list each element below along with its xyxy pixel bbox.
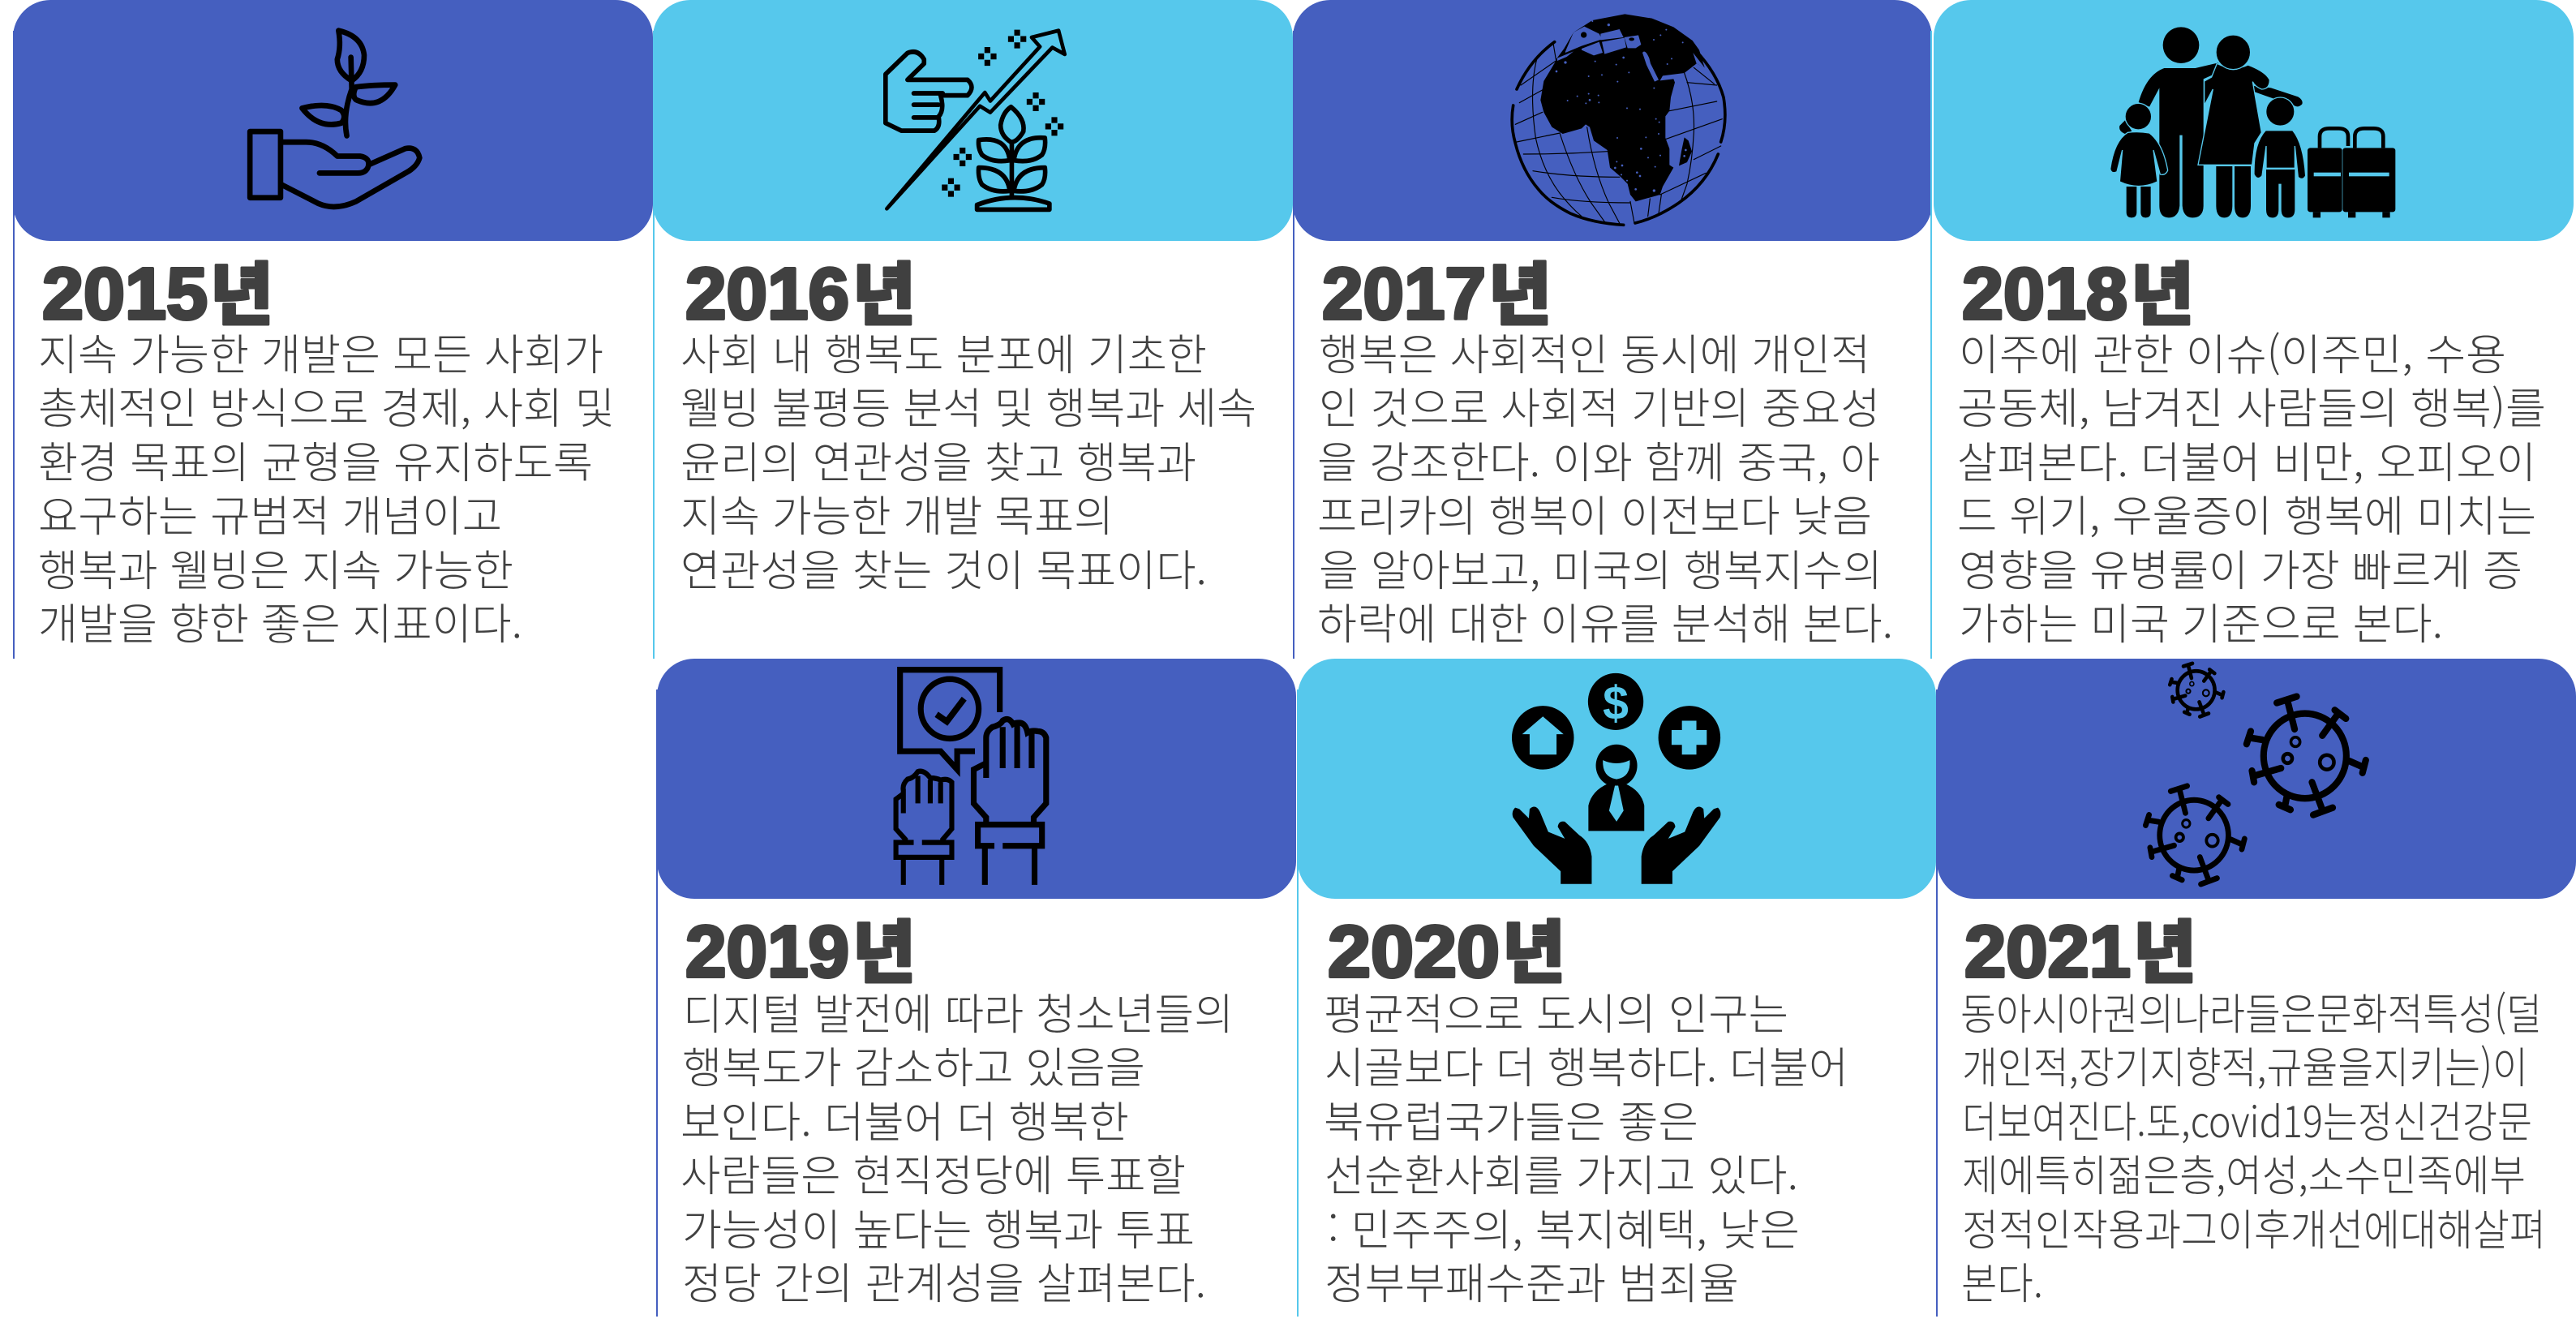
year title: 2018: 년 (2131, 257, 2194, 333)
body text: 2018 (1957, 321, 2546, 652)
body text: 2021: 본다. (1961, 1250, 2043, 1312)
body text: 2019: 사람들은 현직정당에 투표할 (680, 1142, 1186, 1204)
panel: 2016 (653, 0, 1293, 659)
body text: 2020: 정부부패수준과 범죄율 (1324, 1250, 1739, 1312)
body text: 2020 (1324, 981, 1848, 1312)
body text: 2015 (38, 321, 615, 652)
year title: 2017: 년 (1488, 257, 1552, 333)
year title: 2015: 년 (210, 257, 273, 333)
body text: 2017: 을 강조한다. 이와 함께 중국, 아 (1317, 429, 1880, 491)
body text: 2018: 드 위기, 우울증이 행복에 미치는 (1957, 483, 2536, 544)
body text: 2019: 정당 간의 관계성을 살펴본다. (682, 1250, 1206, 1312)
body text: 2019: 디지털 발전에 따라 청소년들의 (683, 981, 1234, 1042)
body text: 2015: 총체적인 방식으로 경제, 사회 및 (38, 375, 615, 436)
year title: 2019: 년 (852, 915, 916, 991)
body text: 2017 (1317, 321, 1893, 652)
body text: 2018: 영향을 유병률이 가장 빠르게 증 (1959, 537, 2522, 599)
body text: 2020: 평균적으로 도시의 인구는 (1324, 981, 1788, 1042)
body text: 2021: 제에특히젊은층,여성,소수민족에부 (1962, 1142, 2526, 1204)
body text: 2016: 연관성을 찾는 것이 목표이다. (680, 537, 1207, 599)
header band: 2019 (657, 659, 1296, 899)
icon: hands with money, home, health and person: $ (1603, 677, 1629, 730)
body text: 2016: 지속 가능한 개발 목표의 (680, 483, 1114, 544)
body text: 2019 (680, 981, 1234, 1312)
year title: 2018: 2018 (1962, 254, 2127, 335)
body text: 2017: 인 것으로 사회적 기반의 중요성 (1319, 375, 1880, 436)
panel: 2018 (1930, 0, 2574, 659)
year title: 2015: 2015 (42, 254, 208, 335)
header band: 2015 (13, 0, 653, 241)
body text: 2021: 정적인작용과그이후개선에대해살펴 (1962, 1196, 2546, 1258)
header band: 2017 (1293, 0, 1932, 241)
year title: 2019: 2019 (685, 912, 849, 993)
body text: 2016: 웰빙 불평등 분석 및 행복과 세속 (680, 375, 1256, 436)
body text: 2018: 공동체, 남겨진 사람들의 행복)를 (1957, 375, 2546, 436)
header band: 2020 (1298, 659, 1936, 899)
year title: 2020 (1328, 912, 1565, 993)
body text: 2017: 을 알아보고, 미국의 행복지수의 (1319, 537, 1883, 599)
body text: 2019: 가능성이 높다는 행복과 투표 (682, 1196, 1195, 1258)
body text: 2020: : 민주주의, 복지혜택, 낮은 (1328, 1196, 1800, 1258)
body text: 2015: 요구하는 규범적 개념이고 (38, 483, 502, 544)
year title: 2021: 년 (2133, 915, 2196, 991)
year title: 2020: 년 (1502, 915, 1565, 991)
header band: 2018 (1934, 0, 2574, 241)
year title: 2016: 2016 (685, 254, 849, 335)
body text: 2016: 윤리의 연관성을 찾고 행복과 (680, 429, 1196, 491)
icon: globe showing Africa (1512, 14, 1725, 225)
body text: 2019: 보인다. 더불어 더 행복한 (680, 1089, 1129, 1150)
icon: pointing hand, rising arrow and wheat (886, 30, 1065, 209)
body text: 2020: 북유럽국가들은 좋은 (1324, 1089, 1698, 1150)
icon: coronavirus particles (2145, 664, 2366, 884)
year title: 2016: 년 (852, 257, 916, 333)
body text: 2020: 선순환사회를 가지고 있다. (1324, 1142, 1798, 1204)
body text: 2019: 행복도가 감소하고 있음을 (682, 1034, 1145, 1096)
body text: 2016 (680, 321, 1256, 599)
body text: 2015: 개발을 향한 좋은 지표이다. (38, 591, 522, 652)
year title: 2020: 2020 (1328, 912, 1500, 993)
body text: 2021 (1960, 981, 2546, 1312)
icon: hand holding sprout (250, 31, 419, 207)
body text: 2017: 프리카의 행복이 이전보다 낮음 (1317, 483, 1872, 544)
panel: 2017 (1293, 0, 1932, 659)
panel: 2015 (13, 0, 653, 659)
icon: migrant family with suitcases (2110, 27, 2395, 217)
icon: hands with money, home, health and person (1512, 673, 1720, 884)
panel: 2021 (1936, 659, 2576, 1317)
year title: 2021: 2021 (1964, 912, 2131, 993)
body text: 2015: 지속 가능한 개발은 모든 사회가 (38, 321, 603, 383)
panel: 2020 (1297, 659, 1936, 1317)
body text: 2018: 이주에 관한 이슈(이주민, 수용 (1959, 321, 2506, 383)
body text: 2015: 행복과 웰빙은 지속 가능한 (38, 537, 513, 599)
body text: 2017: 하락에 대한 이유를 분석해 본다. (1317, 591, 1893, 652)
body text: 2016: 사회 내 행복도 분포에 기초한 (680, 321, 1207, 383)
icon: raised hands voting (896, 670, 1046, 885)
body text: 2018: 살펴본다. 더불어 비만, 오피오이 (1957, 429, 2536, 491)
year title: 2017: 2017 (1322, 254, 1486, 335)
body text: 2021: 개인적,장기지향적,규율을지키는)이 (1962, 1034, 2528, 1096)
body text: 2018: 가하는 미국 기준으로 본다. (1959, 591, 2443, 652)
body text: 2017: 행복은 사회적인 동시에 개인적 (1319, 321, 1870, 383)
header band: 2021 (1937, 659, 2576, 899)
panel: 2019 (656, 659, 1296, 1317)
body text: 2020: 시골보다 더 행복하다. 더불어 (1324, 1034, 1848, 1096)
header band: 2016 (653, 0, 1293, 241)
body text: 2015: 환경 목표의 균형을 유지하도록 (38, 429, 593, 491)
